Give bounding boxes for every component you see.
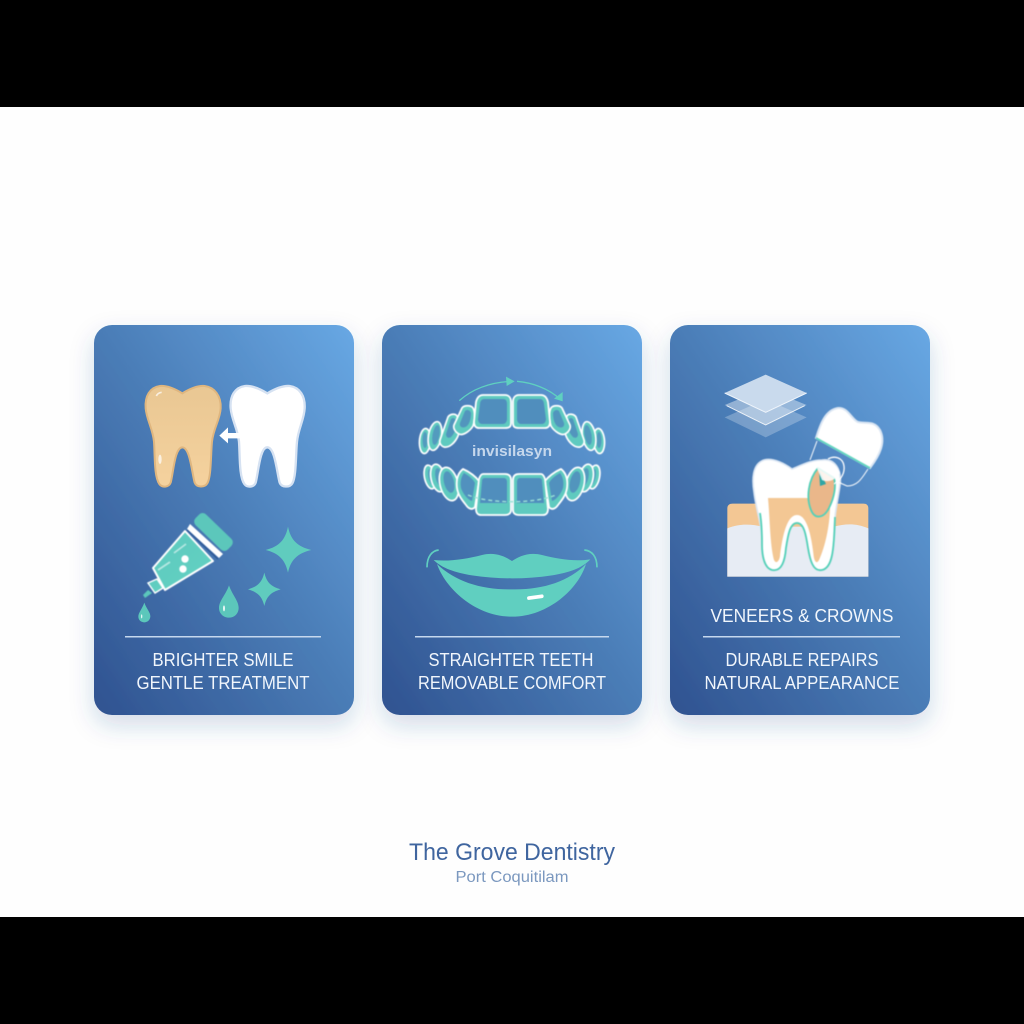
panel: clear aligners [382, 325, 642, 715]
caption: veneers: DURABLE REPAIRS [726, 650, 878, 670]
icon: tooth with filling [753, 459, 840, 570]
caption: whitening: BRIGHTER SMILE [152, 650, 294, 670]
heading: veneers and crowns: VENEERS & CROWNS [710, 606, 894, 626]
icon: smile [427, 550, 597, 617]
divider [125, 636, 321, 638]
icon: upper teeth [419, 395, 605, 454]
caption: aligners: REMOVABLE COMFORT [418, 673, 606, 693]
caption: aligners: STRAIGHTER TEETH [428, 650, 594, 670]
arrow: tooth comparison [219, 427, 240, 443]
caption: aligners [418, 650, 606, 693]
label: aligner brand: invisilasyn [472, 444, 552, 460]
caption: veneers [704, 650, 900, 693]
caption: whitening [136, 650, 310, 693]
icon: stained tooth [146, 386, 221, 487]
icon: veneer layers [725, 375, 807, 437]
footer: clinic name [409, 839, 615, 886]
icon: gum block [727, 504, 868, 577]
arrow: alignment arcs [459, 377, 563, 401]
footer: clinic name: Port Coquitilam [456, 869, 568, 886]
icon: sparkles [248, 527, 311, 606]
icon: crown [810, 408, 882, 486]
panel: teeth whitening [94, 325, 354, 715]
caption: veneers: NATURAL APPEARANCE [704, 673, 900, 693]
divider [415, 636, 609, 638]
icon: lower teeth [422, 463, 602, 515]
icon: whitening gel tube [143, 511, 235, 598]
icon: gel drops [138, 585, 239, 622]
panel: veneers and crowns [670, 325, 930, 715]
caption: whitening: GENTLE TREATMENT [136, 673, 310, 693]
icon: white tooth [231, 386, 305, 487]
divider [703, 636, 900, 638]
footer: clinic name: The Grove Dentistry [409, 839, 615, 866]
dashed aligner line [468, 495, 556, 502]
